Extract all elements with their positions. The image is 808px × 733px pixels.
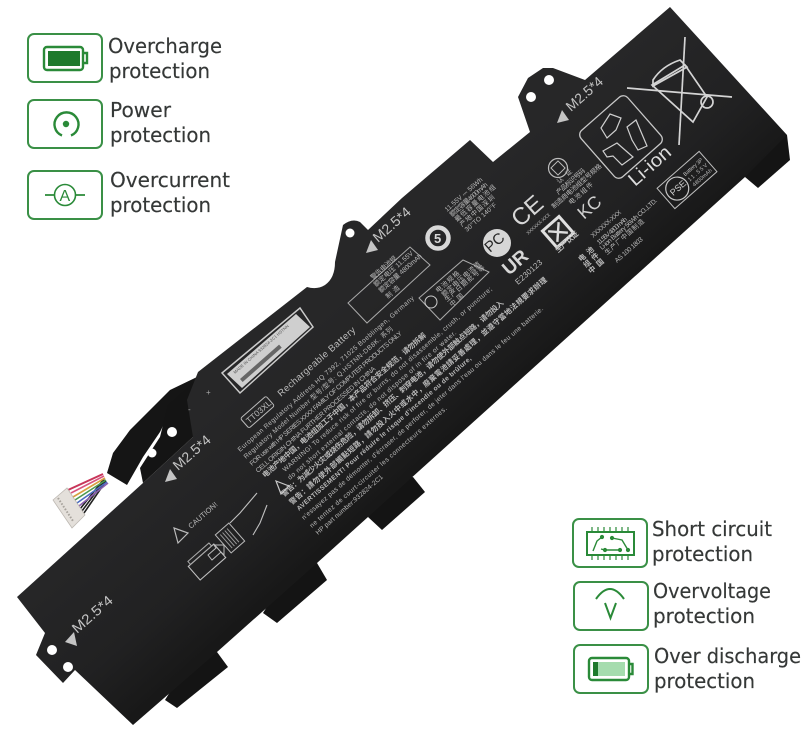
- label: Li-ion: Li-ion: [624, 142, 676, 191]
- label: M2.5*4 bottom left: M2.5*4: [68, 592, 116, 636]
- legend: Short circuit protection: protection: [652, 542, 753, 566]
- label: M2.5*4 centre: M2.5*4: [369, 203, 414, 245]
- UR mark: UR: [498, 246, 533, 280]
- X box mark: [542, 216, 574, 248]
- warning text block: WARNING! To reduce risk of fire or burns, do not disassemble, crush, or puncture;: [282, 286, 494, 474]
- spec text top: XXXXXX-XXX: [590, 209, 623, 240]
- PSE box: [657, 151, 717, 209]
- icon: circuit board: [587, 527, 634, 560]
- legend: Power protection: protection: [110, 123, 211, 147]
- legend: Overvoltage protection: protection: [653, 604, 755, 628]
- icon: full battery: [44, 47, 87, 70]
- legend: Overcharge protection: protection: [109, 59, 210, 83]
- label: M2.5*4 cable side: M2.5*4: [169, 431, 214, 473]
- spec text top: 生产厂中国制造: [602, 216, 646, 257]
- icon: low battery: [589, 658, 632, 680]
- KC mark: KC: [573, 191, 605, 223]
- spec text top: 电池: [576, 244, 596, 264]
- spec text top: 电池组件: [566, 180, 595, 207]
- icon: ammeter: [45, 184, 85, 206]
- label: M2.5*4 top right: M2.5*4: [562, 73, 606, 114]
- UR mark: [498, 246, 545, 287]
- spec box two: 中国: [447, 291, 466, 309]
- polarity marks: +: [206, 388, 211, 397]
- legend: Over discharge protection: [574, 644, 801, 693]
- label: M2.5*4 bottom left: [65, 592, 116, 646]
- side brackets: [140, 130, 790, 708]
- legend: Over discharge protection: protection: [654, 669, 755, 693]
- spec text top: 产地中国深圳: [457, 192, 497, 229]
- spec box two: 电池规格: [433, 268, 461, 295]
- compliance marks: [222, 151, 717, 393]
- warning triangle: [276, 481, 289, 494]
- legend: Overcharge protection: Overcharge: [108, 34, 222, 58]
- spec text top: 11.55V ⎓ 56Wh: [444, 176, 485, 214]
- spec text top: 制造商电池组型号规格: [549, 161, 604, 211]
- warning text block: AVERTISSEMENT! Pour réduire le risque d'incendie ou de brûlure,: [296, 355, 473, 513]
- model tag: TT03XL: [244, 398, 273, 426]
- serial sticker: MADE IN CHINA 932824-2C1 HSTNN: [232, 323, 290, 375]
- legend: Over discharge protection: Over discharge: [654, 644, 801, 668]
- legend: Overcurrent protection: Overcurrent: [110, 168, 230, 192]
- certification circle: [548, 158, 568, 178]
- spec text top: 额定容量4600mAh: [447, 180, 490, 219]
- spec text top: 组件: [581, 250, 601, 270]
- legend: Overvoltage protection: Overvoltage: [653, 579, 771, 603]
- mounting holes: [47, 75, 554, 672]
- label: CAUTION!: CAUTION!: [186, 500, 219, 531]
- legend: Power protection: Power: [110, 98, 172, 122]
- spec text top: Li-ion Battery 56Wh CO.,LTD.: [599, 197, 659, 252]
- spec box one: 警告电池规: [368, 253, 399, 282]
- label: Rechargeable Battery: Rechargeable Battery: [276, 325, 358, 399]
- PSE box: 4800mAh: [692, 168, 714, 188]
- warning text block: FOR use with HP SERIES XXXX FAMILY OF COMPUTER PRODUCTS ONLY: [249, 330, 404, 468]
- warning text block: ne tentez de court-circuiter les connecteurs externes.: [309, 405, 449, 530]
- warning text block: 电池产地中国，电池组加工于中国，本产品符合安全规范，请勿拆解: [260, 330, 428, 480]
- legend: Overcurrent protection: [28, 168, 230, 219]
- PSE box: Battery 3P: [682, 157, 705, 178]
- warning text block: Regulatory Model Number 型号/型号: Q.HSTNN-DB8K. 系列: [241, 324, 395, 461]
- crossed-out bin: [627, 37, 732, 145]
- legend: Overvoltage protection: [574, 579, 771, 630]
- legend: Short circuit protection: Short circuit: [652, 517, 772, 541]
- UR mark: E230123: [513, 258, 545, 287]
- spec box two: 生产日期批号等: [442, 263, 487, 304]
- spec text top: AS 100 1803: [614, 236, 645, 265]
- spec box two: [419, 259, 489, 320]
- warning text block: 警告：为减少火灾或烧伤危险，请勿拆卸、挤压、刺穿电池，请勿使外部触点短路，请勿投入: [279, 298, 506, 499]
- spec box one: 额定电压 11.55V: [371, 248, 415, 289]
- spec box one: 制造: [383, 283, 402, 301]
- recycling 5 circle: 5: [434, 231, 441, 246]
- cable and connector: [53, 377, 210, 528]
- spec box two: 额定电压电流值: [439, 259, 482, 299]
- recycling symbol: [577, 93, 676, 191]
- legend: Overcurrent protection: protection: [110, 193, 211, 217]
- spec box one: [348, 247, 430, 323]
- warning text block: European Regulatory Address HQ 7392, 71025 Boeblingen, Germany: [237, 295, 416, 454]
- spec box one: 额定容量 4800mAh: [376, 251, 424, 295]
- warning text block: n'essayez pas de démonter, d'écraser, de perforer, de jeter dans l'eau ou dans le feu une batterie.: [301, 306, 545, 522]
- spec text top: [444, 161, 659, 276]
- caution pictogram: [174, 493, 267, 580]
- spec text top: 30°TO 140°F: [463, 201, 498, 234]
- polarity marks: -: [188, 405, 191, 414]
- PCT mark: PC: [481, 229, 508, 256]
- icon: voltmeter arc: [596, 589, 624, 618]
- screw labels: [65, 37, 732, 646]
- icon: ammeter: A: [60, 188, 70, 205]
- PSE box: PSE: [668, 178, 688, 198]
- recycling 5 circle: [428, 228, 448, 248]
- spec text top: XXXXXX-XXX: [525, 212, 552, 237]
- spec text top: 认证: [554, 167, 574, 186]
- spec text top: 11.55V 4800mAh: [596, 216, 629, 247]
- serial sticker: [222, 308, 313, 393]
- spec text top: 生产认证: [553, 229, 581, 255]
- warning text block: do not short external contacts, do not dispose of in fire or water.: [287, 330, 458, 482]
- legend: Short circuit protection: [573, 517, 772, 567]
- spec text top: 中国: [586, 257, 606, 276]
- warning text block: HP part number:932824-2C1: [315, 474, 385, 537]
- warning text block: 警告：請勿使外部觸點短路，請勿投入火中或水中，廢棄電池請妥善處理，並遵守當地法規要求辦理: [287, 275, 549, 507]
- polarity marks: [188, 388, 211, 414]
- spec text top: 最低容量电池组: [452, 182, 498, 224]
- PSE box: 11.55V: [687, 163, 709, 183]
- legend: Power protection: [28, 98, 211, 148]
- CE mark: CE: [506, 190, 549, 233]
- legend: Overcharge protection: [28, 34, 222, 83]
- warning text block: CELL ORIGIN CHINA FURTHER PROCESSED IN CHINA: [255, 365, 378, 475]
- icon: power ring: [54, 112, 79, 136]
- spec text top: 产品标识号码: [554, 166, 587, 197]
